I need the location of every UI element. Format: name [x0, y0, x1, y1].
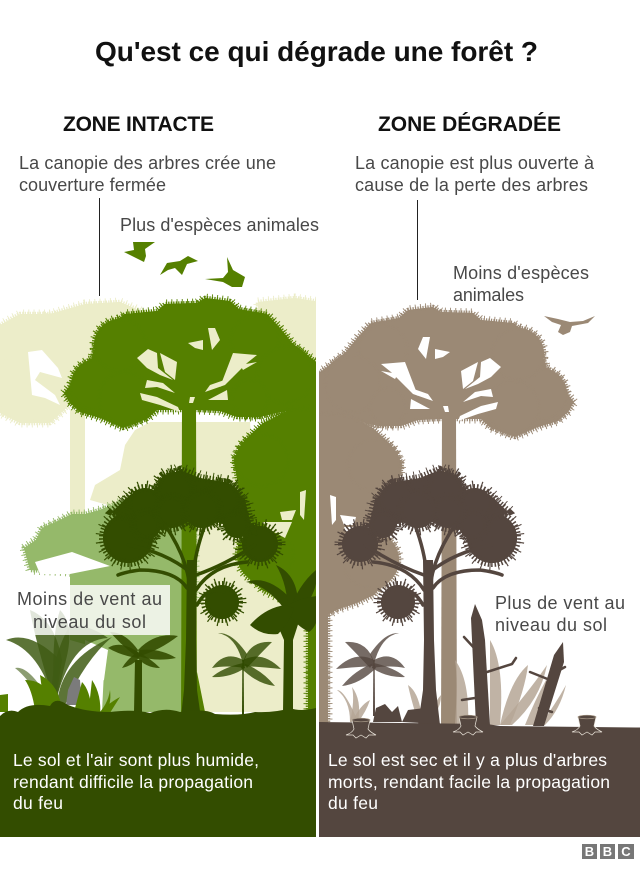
mid green main tree	[64, 298, 322, 725]
animal in undergrowth	[66, 677, 82, 705]
text: more wind	[495, 593, 625, 635]
logo: BBC: B	[585, 844, 594, 859]
text: canopy closed: couverture fermée	[19, 175, 166, 195]
text: more wind: niveau du sol	[495, 615, 607, 635]
text: dry soil	[328, 750, 610, 813]
small tree fern	[336, 633, 405, 716]
forest illustration: intact	[0, 298, 325, 837]
tan left tree	[311, 413, 402, 735]
text: moist soil: rendant difficile la propagation	[13, 772, 253, 792]
text: dry soil: du feu	[328, 793, 378, 813]
text: less wind: Moins de vent au	[17, 589, 162, 609]
text: less wind: niveau du sol	[33, 612, 146, 632]
logo: BBC: C	[621, 844, 631, 859]
tan main tree	[316, 307, 574, 734]
heading: zone intacte: ZONE INTACTE	[63, 113, 214, 136]
icon: three birds	[124, 242, 245, 287]
ground: degraded	[319, 722, 640, 837]
text: dry soil: morts, rendant facile la propagation	[328, 772, 610, 792]
big fern: left	[6, 610, 112, 705]
text: fewer animal species	[453, 263, 589, 305]
text: canopy open: cause de la perte des arbres	[355, 175, 588, 195]
mid green right tree	[230, 408, 316, 710]
dark brown tree	[342, 470, 517, 725]
text: more animal species: Plus d'espèces animales	[120, 215, 319, 235]
mid green base flare	[196, 672, 205, 711]
title: Qu'est ce qui dégrade une forêt ?	[95, 36, 538, 67]
text: canopy open	[355, 153, 595, 195]
text: moist soil: du feu	[13, 793, 63, 813]
text: dry soil: Le sol est sec et il y a plus d'arbres	[328, 750, 607, 770]
panel: zone intacte	[0, 113, 325, 837]
forest illustration: degraded	[311, 307, 640, 837]
light green understory	[24, 496, 195, 712]
ground shrubs	[373, 704, 440, 724]
text: moist soil	[13, 750, 259, 813]
tree stumps	[346, 715, 602, 738]
text: less wind	[17, 589, 162, 632]
tan ferns	[337, 640, 566, 725]
dead tree 1	[462, 604, 516, 725]
small tree fern	[212, 633, 281, 716]
logo: BBC: B	[603, 844, 612, 859]
leader line: canopy	[416, 200, 418, 300]
text: canopy open: La canopie est plus ouverte à	[355, 153, 595, 173]
ground: intact	[0, 701, 316, 837]
background light trees	[0, 298, 320, 712]
text: canopy closed	[19, 153, 276, 195]
green leaves undergrowth	[0, 675, 120, 716]
palm: center	[108, 632, 178, 712]
text: fewer animal species: animales	[453, 285, 524, 305]
palm: right	[246, 565, 320, 712]
logo: BBC	[582, 844, 634, 859]
white note box	[30, 585, 170, 635]
text: moist soil: Le sol et l'air sont plus humide,	[13, 750, 259, 770]
panel: zone dégradée	[311, 113, 640, 837]
text: canopy closed: La canopie des arbres crée une	[19, 153, 276, 173]
icon: one bird	[544, 316, 595, 335]
heading: zone dégradée: ZONE DÉGRADÉE	[378, 113, 561, 136]
text: more wind: Plus de vent au	[495, 593, 625, 613]
dark tree	[103, 470, 278, 725]
dead tree 2	[530, 642, 565, 726]
text: fewer animal species: Moins d'espèces	[453, 263, 589, 283]
leader line: canopy	[98, 198, 100, 296]
